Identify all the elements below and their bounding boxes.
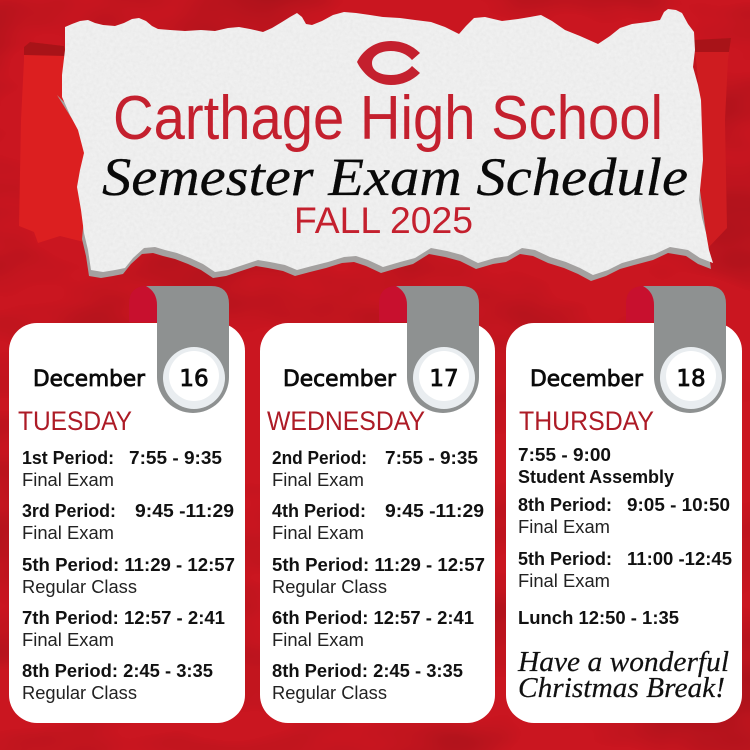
period 2: 2nd Period: (272, 448, 367, 468)
date circle: 17 (429, 366, 459, 392)
period 8 (272, 661, 463, 703)
month: December (283, 367, 397, 392)
month: December (530, 367, 644, 392)
period 5: 5th Period: 11:29 - 12:57 (272, 555, 485, 575)
period 8 (518, 495, 730, 537)
ribbon date tab (146, 286, 229, 413)
panel: Wednesday December 17 (260, 286, 495, 723)
closing message (517, 647, 729, 704)
period 7 (22, 608, 225, 650)
period 4: 9:45 -11:29 (385, 501, 484, 521)
period 2: Final Exam (272, 470, 364, 490)
card background (260, 323, 495, 723)
period 4: 4th Period: (272, 501, 366, 521)
period 8: 8th Period: 2:45 - 3:35 (22, 661, 213, 681)
period 3: 3rd Period: (22, 501, 116, 521)
date circle (413, 347, 475, 409)
period 5 (22, 555, 235, 597)
period 1: 7:55 - 9:35 (129, 448, 222, 468)
ribbon red tab (129, 286, 157, 322)
card background (506, 323, 742, 723)
period 7: 7th Period: 12:57 - 2:41 (22, 608, 225, 628)
torn white paper banner (62, 9, 713, 275)
period 5: 11:00 -12:45 (627, 549, 732, 569)
period 4: Final Exam (272, 523, 364, 543)
panel: Thursday December 18 (506, 286, 742, 723)
ribbon date tab (643, 286, 726, 413)
student assembly: 7:55 - 9:00 (518, 445, 611, 465)
period 5 (518, 549, 732, 591)
period 6 (272, 608, 474, 650)
period 5: Regular Class (22, 577, 137, 597)
period 8: 8th Period: (518, 495, 612, 515)
period 5: 5th Period: 11:29 - 12:57 (22, 555, 235, 575)
closing message: Christmas Break! (518, 673, 725, 704)
ribbon date tab (396, 286, 479, 413)
panel: Tuesday December 16 (9, 286, 245, 723)
period 5: Regular Class (272, 577, 387, 597)
period 6: 6th Period: 12:57 - 2:41 (272, 608, 474, 628)
period 6: Final Exam (272, 630, 364, 650)
period 8: Regular Class (272, 683, 387, 703)
period 8: 8th Period: 2:45 - 3:35 (272, 661, 463, 681)
month: December (33, 367, 146, 392)
period 5 (272, 555, 485, 597)
period 8: Final Exam (518, 517, 610, 537)
period 4 (272, 501, 484, 543)
period 3: Final Exam (22, 523, 114, 543)
student assembly: Student Assembly (518, 467, 674, 487)
ribbon red tab (379, 286, 407, 322)
date circle (163, 347, 225, 409)
card background (9, 323, 245, 723)
torn paper shadow (57, 95, 711, 281)
period 1: 1st Period: (22, 448, 114, 468)
period 3 (22, 501, 234, 543)
period 1: Final Exam (22, 470, 114, 490)
period 8: Regular Class (22, 683, 137, 703)
period 8: 9:05 - 10:50 (627, 495, 730, 515)
period 3: 9:45 -11:29 (135, 501, 234, 521)
period 8 (22, 661, 213, 703)
period 2: 7:55 - 9:35 (385, 448, 478, 468)
term: FALL 2025: FALL 2025 (294, 200, 473, 241)
student assembly (518, 445, 674, 487)
period 2 (272, 448, 478, 490)
period 7: Final Exam (22, 630, 114, 650)
right torn red tape (694, 38, 731, 248)
weekday: TUESDAY (18, 406, 132, 436)
period 5: 5th Period: (518, 549, 612, 569)
subtitle: Semester Exam Schedule: Semester Exam Schedule (102, 147, 688, 207)
ribbon red tab (626, 286, 654, 322)
school C logo (357, 41, 420, 85)
lunch: Lunch 12:50 - 1:35 (518, 608, 679, 628)
weekday: THURSDAY (519, 406, 654, 436)
period 5: Final Exam (518, 571, 610, 591)
period 1 (22, 448, 222, 490)
date circle: 18 (676, 366, 706, 392)
date circle (660, 347, 722, 409)
date circle: 16 (179, 366, 209, 392)
title: Carthage High School: Carthage High School (113, 84, 663, 153)
left torn red tape (19, 42, 85, 243)
closing message: Have a wonderful (517, 647, 729, 678)
weekday: WEDNESDAY (267, 406, 425, 436)
